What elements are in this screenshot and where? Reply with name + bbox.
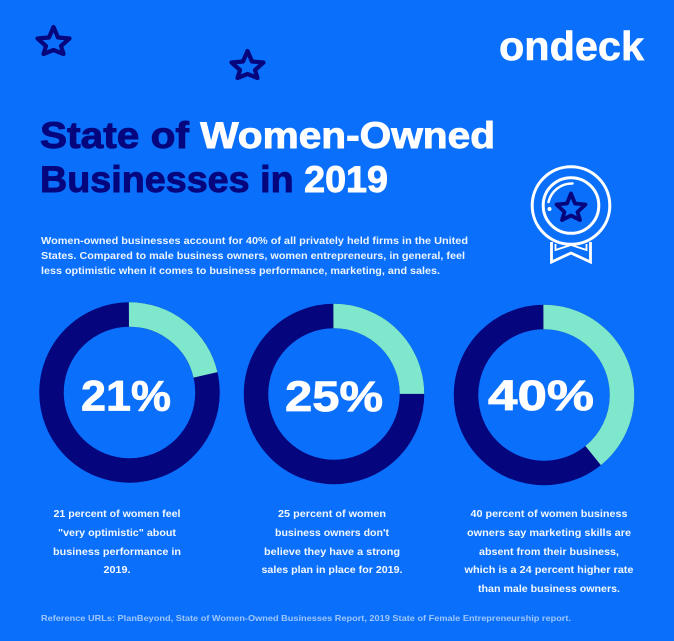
caption: 21%: 21 percent of women feel	[54, 508, 181, 520]
caption: 40%: which is a 24 percent higher rate	[463, 564, 634, 576]
intro text: less optimistic when it comes to business performance, marketing, and sales.	[41, 265, 440, 277]
caption: 21%: "very optimistic" about	[58, 527, 177, 539]
intro text: States. Compared to male business owners, women entrepreneurs, in general, feel	[41, 250, 465, 262]
caption: 25%	[262, 508, 403, 576]
caption: 40%	[463, 508, 634, 595]
caption: 21%: business performance in	[53, 546, 181, 558]
title	[40, 115, 495, 200]
icon: medal with star	[532, 167, 610, 262]
caption: 40%: owners say marketing skills are	[467, 527, 631, 539]
donut chart: 40%: 40%	[488, 372, 594, 420]
title: State of Women-Owned	[40, 115, 495, 156]
caption: 25%: 25 percent of women	[278, 508, 386, 520]
caption: 21%	[53, 508, 181, 576]
title: Businesses in 2019	[40, 159, 388, 200]
caption: 25%: sales plan in place for 2019.	[262, 564, 403, 576]
logo: ondeck: ondeck	[499, 23, 644, 69]
caption: 25%: believe they have a strong	[264, 546, 400, 558]
donut chart: 25%	[256, 316, 412, 472]
reference URLs footnote: Reference URLs: PlanBeyond, State of Women-Owned Businesses Report, 2019 State of Female Entrepreneurship report.	[41, 613, 571, 623]
caption: 21%: 2019.	[104, 564, 131, 576]
donut chart: 21%	[52, 314, 208, 470]
intro text	[41, 235, 468, 277]
donut chart: 21%: 21%	[81, 372, 171, 420]
icon: star top centre	[232, 51, 264, 78]
icon: star top left	[38, 27, 70, 54]
intro text: Women-owned businesses account for 40% of all privately held firms in the United	[41, 235, 468, 247]
caption: 25%: business owners don't	[275, 527, 389, 539]
donut chart: 25%: 25%	[285, 373, 383, 421]
donut chart: 40%	[466, 317, 622, 473]
caption: 40%: absent from their business,	[479, 546, 619, 558]
caption: 40%: than male business owners.	[478, 583, 620, 595]
caption: 40%: 40 percent of women business	[470, 508, 628, 520]
